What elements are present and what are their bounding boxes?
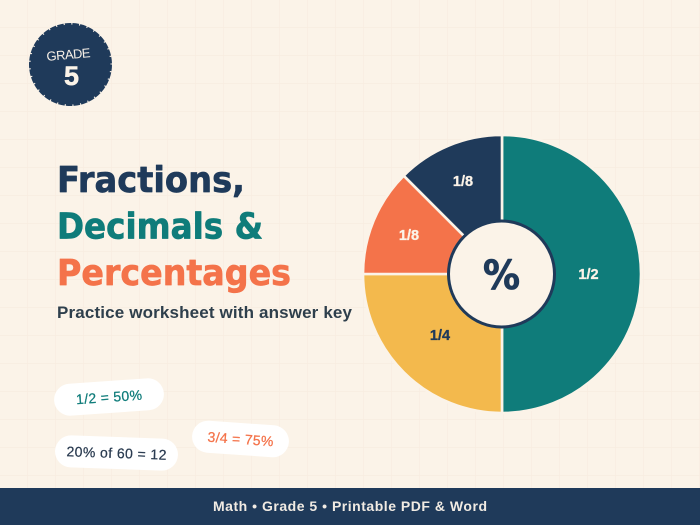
center circle with percent sign — [448, 221, 554, 327]
label: 1/8 orange: 1/8 — [399, 228, 419, 244]
slice: 1/2 teal — [502, 135, 641, 413]
label: 1/2: 1/2 — [578, 267, 599, 283]
chart: fraction pie — [363, 135, 641, 413]
center circle with percent sign: % — [483, 253, 520, 299]
label: 1/4: 1/4 — [430, 328, 450, 344]
title: Percentages — [57, 253, 291, 294]
chip: 3/4 = 75%: 3/4 = 75% — [207, 429, 274, 449]
slice: 1/8 orange — [363, 176, 502, 274]
chip: 20% of 60 = 12: 20% of 60 = 12 — [66, 443, 167, 463]
badge: grade 5: GRADE — [46, 45, 91, 64]
chip: 1/2 = 50%: 1/2 = 50% — [76, 387, 142, 407]
title: Fractions, — [57, 160, 245, 201]
title — [57, 160, 291, 294]
slice: 1/4 yellow — [363, 274, 502, 413]
chip: 1/2 = 50% — [53, 377, 165, 417]
footer bar: Math • Grade 5 • Printable PDF & Word — [213, 498, 487, 514]
badge: grade 5: 5 — [64, 61, 79, 91]
chip: 20% of 60 = 12 — [54, 435, 179, 471]
badge: grade 5 — [30, 24, 111, 105]
subtitle: Practice worksheet with answer key — [57, 303, 353, 322]
slice: 1/8 navy — [404, 135, 502, 274]
chip: 3/4 = 75% — [191, 420, 290, 458]
label: 1/8 navy: 1/8 — [453, 174, 473, 190]
title: Decimals & — [57, 206, 263, 248]
footer bar — [0, 488, 700, 525]
